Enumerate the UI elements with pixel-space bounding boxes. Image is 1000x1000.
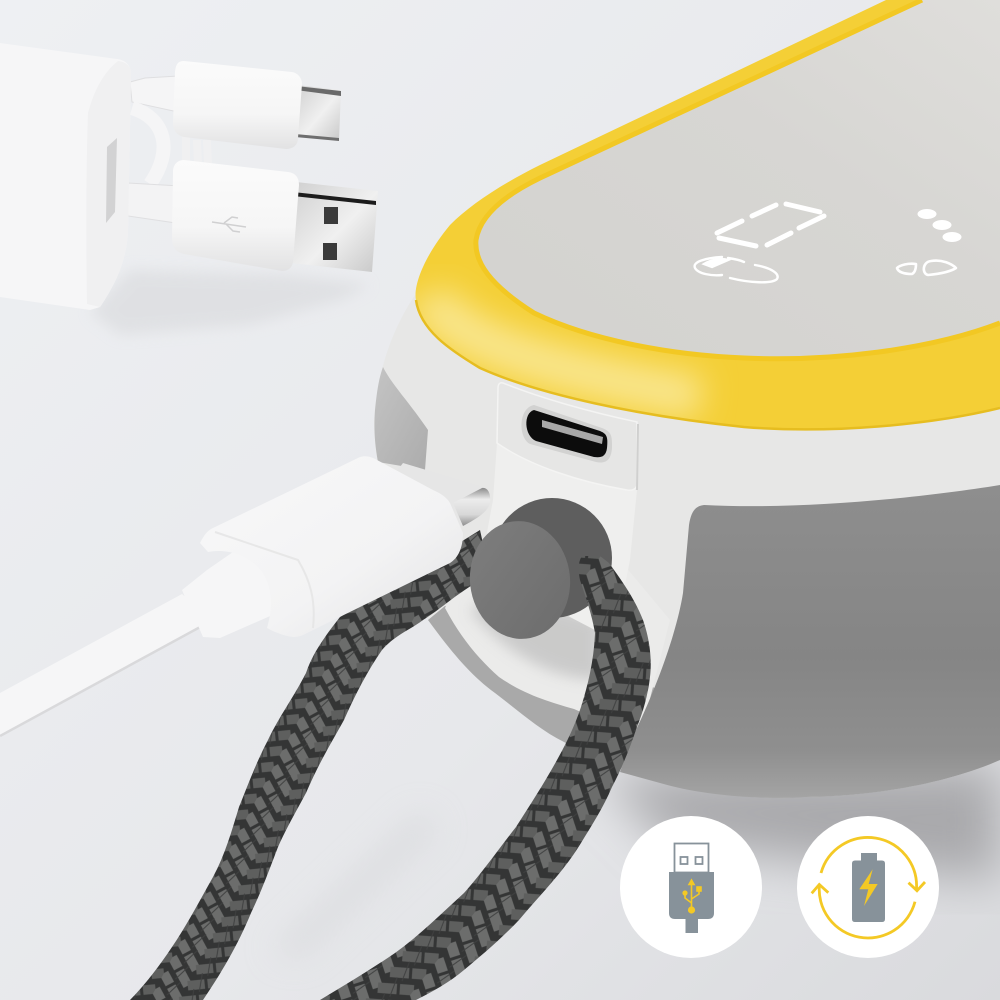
port bezel <box>521 405 612 462</box>
usb-c metal tip <box>453 488 490 526</box>
usb cap outline <box>674 844 708 872</box>
battery <box>852 853 885 922</box>
charger shadow <box>90 270 370 335</box>
usb-a metal tip <box>291 182 378 272</box>
cycle arrows <box>812 837 925 938</box>
device: body <box>374 295 1000 798</box>
adapter usb port <box>106 138 117 223</box>
grey body panel <box>620 485 1000 798</box>
connector neck usb-a <box>128 183 180 223</box>
usb-c plug body <box>173 61 302 149</box>
display: dots <box>918 209 962 242</box>
bundled cables <box>186 135 208 165</box>
yellow rim lower edge <box>416 300 1000 429</box>
cable <box>0 594 213 737</box>
usb symbol <box>683 880 701 913</box>
display: seven segment digit <box>717 204 824 246</box>
connector neck usb-c <box>130 76 178 112</box>
adapter front face <box>86 61 131 307</box>
lower white lip <box>445 560 670 738</box>
usb body <box>669 872 714 933</box>
device: grey top panel <box>476 0 1000 359</box>
charger: wall adapter and plugs <box>0 43 378 310</box>
usb-c port <box>526 410 607 457</box>
collar seam <box>637 424 638 490</box>
plug body <box>200 456 463 637</box>
device shadow on surface <box>600 765 1000 880</box>
usb-a plug body <box>172 160 299 271</box>
strain relief <box>182 550 282 638</box>
center socket plate <box>480 443 637 640</box>
cable loop <box>132 108 164 184</box>
usb-c shell <box>390 463 488 530</box>
bolt <box>859 869 878 906</box>
rope: right strand <box>320 556 651 1000</box>
display: pump icon right <box>897 261 956 275</box>
cable plug into device <box>0 456 490 737</box>
port contacts <box>542 420 603 444</box>
display: pump icon left <box>695 257 778 282</box>
lip shade beneath knob <box>470 590 600 680</box>
usb-a holes <box>324 207 338 224</box>
grey skirt <box>428 606 1000 798</box>
device: yellow rim <box>416 0 1000 429</box>
yellow rim highlight <box>430 295 700 398</box>
knob: grey retaining button <box>464 498 612 644</box>
rope: left strand <box>130 530 490 1000</box>
badge: battery charge cycle icon <box>797 816 939 958</box>
socket raised frame <box>497 383 637 490</box>
rope shadow on surface <box>270 810 440 960</box>
left grey inset <box>374 367 428 470</box>
usb logo on plug <box>212 217 246 232</box>
adapter side <box>0 43 131 310</box>
panel inner ridge <box>476 0 1000 359</box>
white collar and housing <box>374 295 1000 798</box>
plug bevel <box>215 532 314 628</box>
usb-c metal tip <box>295 85 341 140</box>
badge: usb connector icon <box>620 816 762 958</box>
